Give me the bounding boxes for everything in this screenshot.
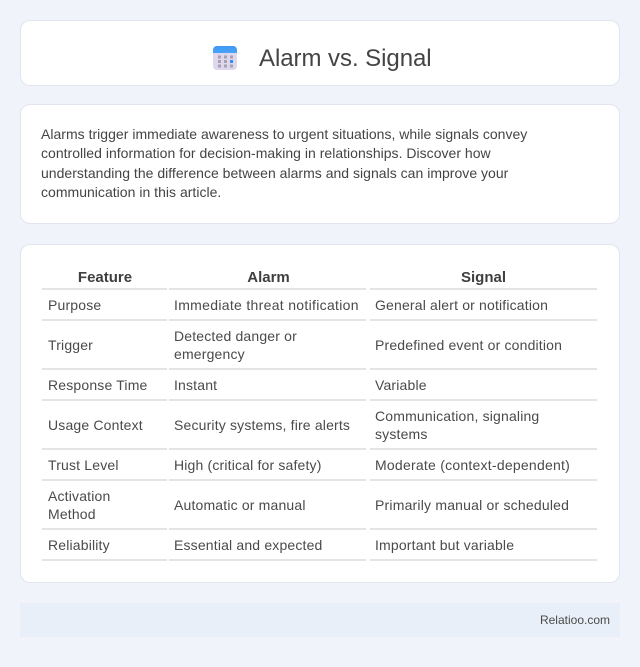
- row: Trigger: Predefined event or condition: [375, 337, 562, 353]
- title: Alarm vs. Signal: [259, 45, 432, 72]
- row: Purpose: Immediate threat notification: [174, 297, 359, 313]
- row: Response Time: Response Time: [48, 377, 147, 393]
- panel: intro text: [20, 104, 620, 224]
- row: Activation Method: Method: [48, 506, 96, 522]
- row: Activation Method: Activation: [48, 488, 110, 504]
- comparison table: [42, 269, 597, 561]
- row: Usage Context: systems: [375, 426, 428, 442]
- table header: Feature: [78, 269, 132, 286]
- row: Response Time: [48, 377, 427, 393]
- row: Response Time: Variable: [375, 377, 427, 393]
- row: Reliability: Reliability: [48, 537, 110, 553]
- row: Trust Level: Moderate (context-dependent): [375, 457, 570, 473]
- row: Usage Context: [48, 408, 539, 442]
- row: Usage Context: Communication, signaling: [375, 408, 539, 424]
- row: Purpose: General alert or notification: [375, 297, 548, 313]
- row: Trigger: emergency: [174, 346, 245, 362]
- row: Response Time: Instant: [174, 377, 217, 393]
- panel: comparison table: [20, 244, 620, 583]
- table header: [78, 269, 506, 286]
- intro paragraph: controlled information for decision-making in relationships. Discover how: [41, 145, 491, 161]
- row: Usage Context: Usage Context: [48, 417, 143, 433]
- row: Activation Method: [48, 488, 569, 522]
- row: Reliability: [48, 537, 514, 553]
- intro paragraph: Alarms trigger immediate awareness to urgent situations, while signals convey: [41, 126, 527, 142]
- row: Trust Level: [48, 457, 570, 473]
- panel: title card: [20, 20, 620, 86]
- row: Trigger: [48, 328, 562, 362]
- table header: Signal: [461, 269, 506, 286]
- intro paragraph: communication in this article.: [41, 184, 221, 200]
- row: Reliability: Essential and expected: [174, 537, 323, 553]
- footer credit: Relatioo.com: [540, 613, 610, 627]
- row: Activation Method: Automatic or manual: [174, 497, 306, 513]
- footer bar: [20, 603, 620, 637]
- icon: calendar: [213, 46, 237, 70]
- row: Trust Level: Trust Level: [48, 457, 119, 473]
- intro paragraph: understanding the difference between alarms and signals can improve your: [41, 165, 508, 181]
- row: Trust Level: High (critical for safety): [174, 457, 322, 473]
- row: Trigger: Detected danger or: [174, 328, 297, 344]
- row: Trigger: Trigger: [48, 337, 93, 353]
- row: Purpose: Purpose: [48, 297, 101, 313]
- table header: Alarm: [247, 269, 290, 286]
- intro paragraph: [41, 126, 528, 200]
- row: Activation Method: Primarily manual or scheduled: [375, 497, 569, 513]
- row: Usage Context: Security systems, fire alerts: [174, 417, 350, 433]
- row: Reliability: Important but variable: [375, 537, 514, 553]
- row: Purpose: [48, 297, 548, 313]
